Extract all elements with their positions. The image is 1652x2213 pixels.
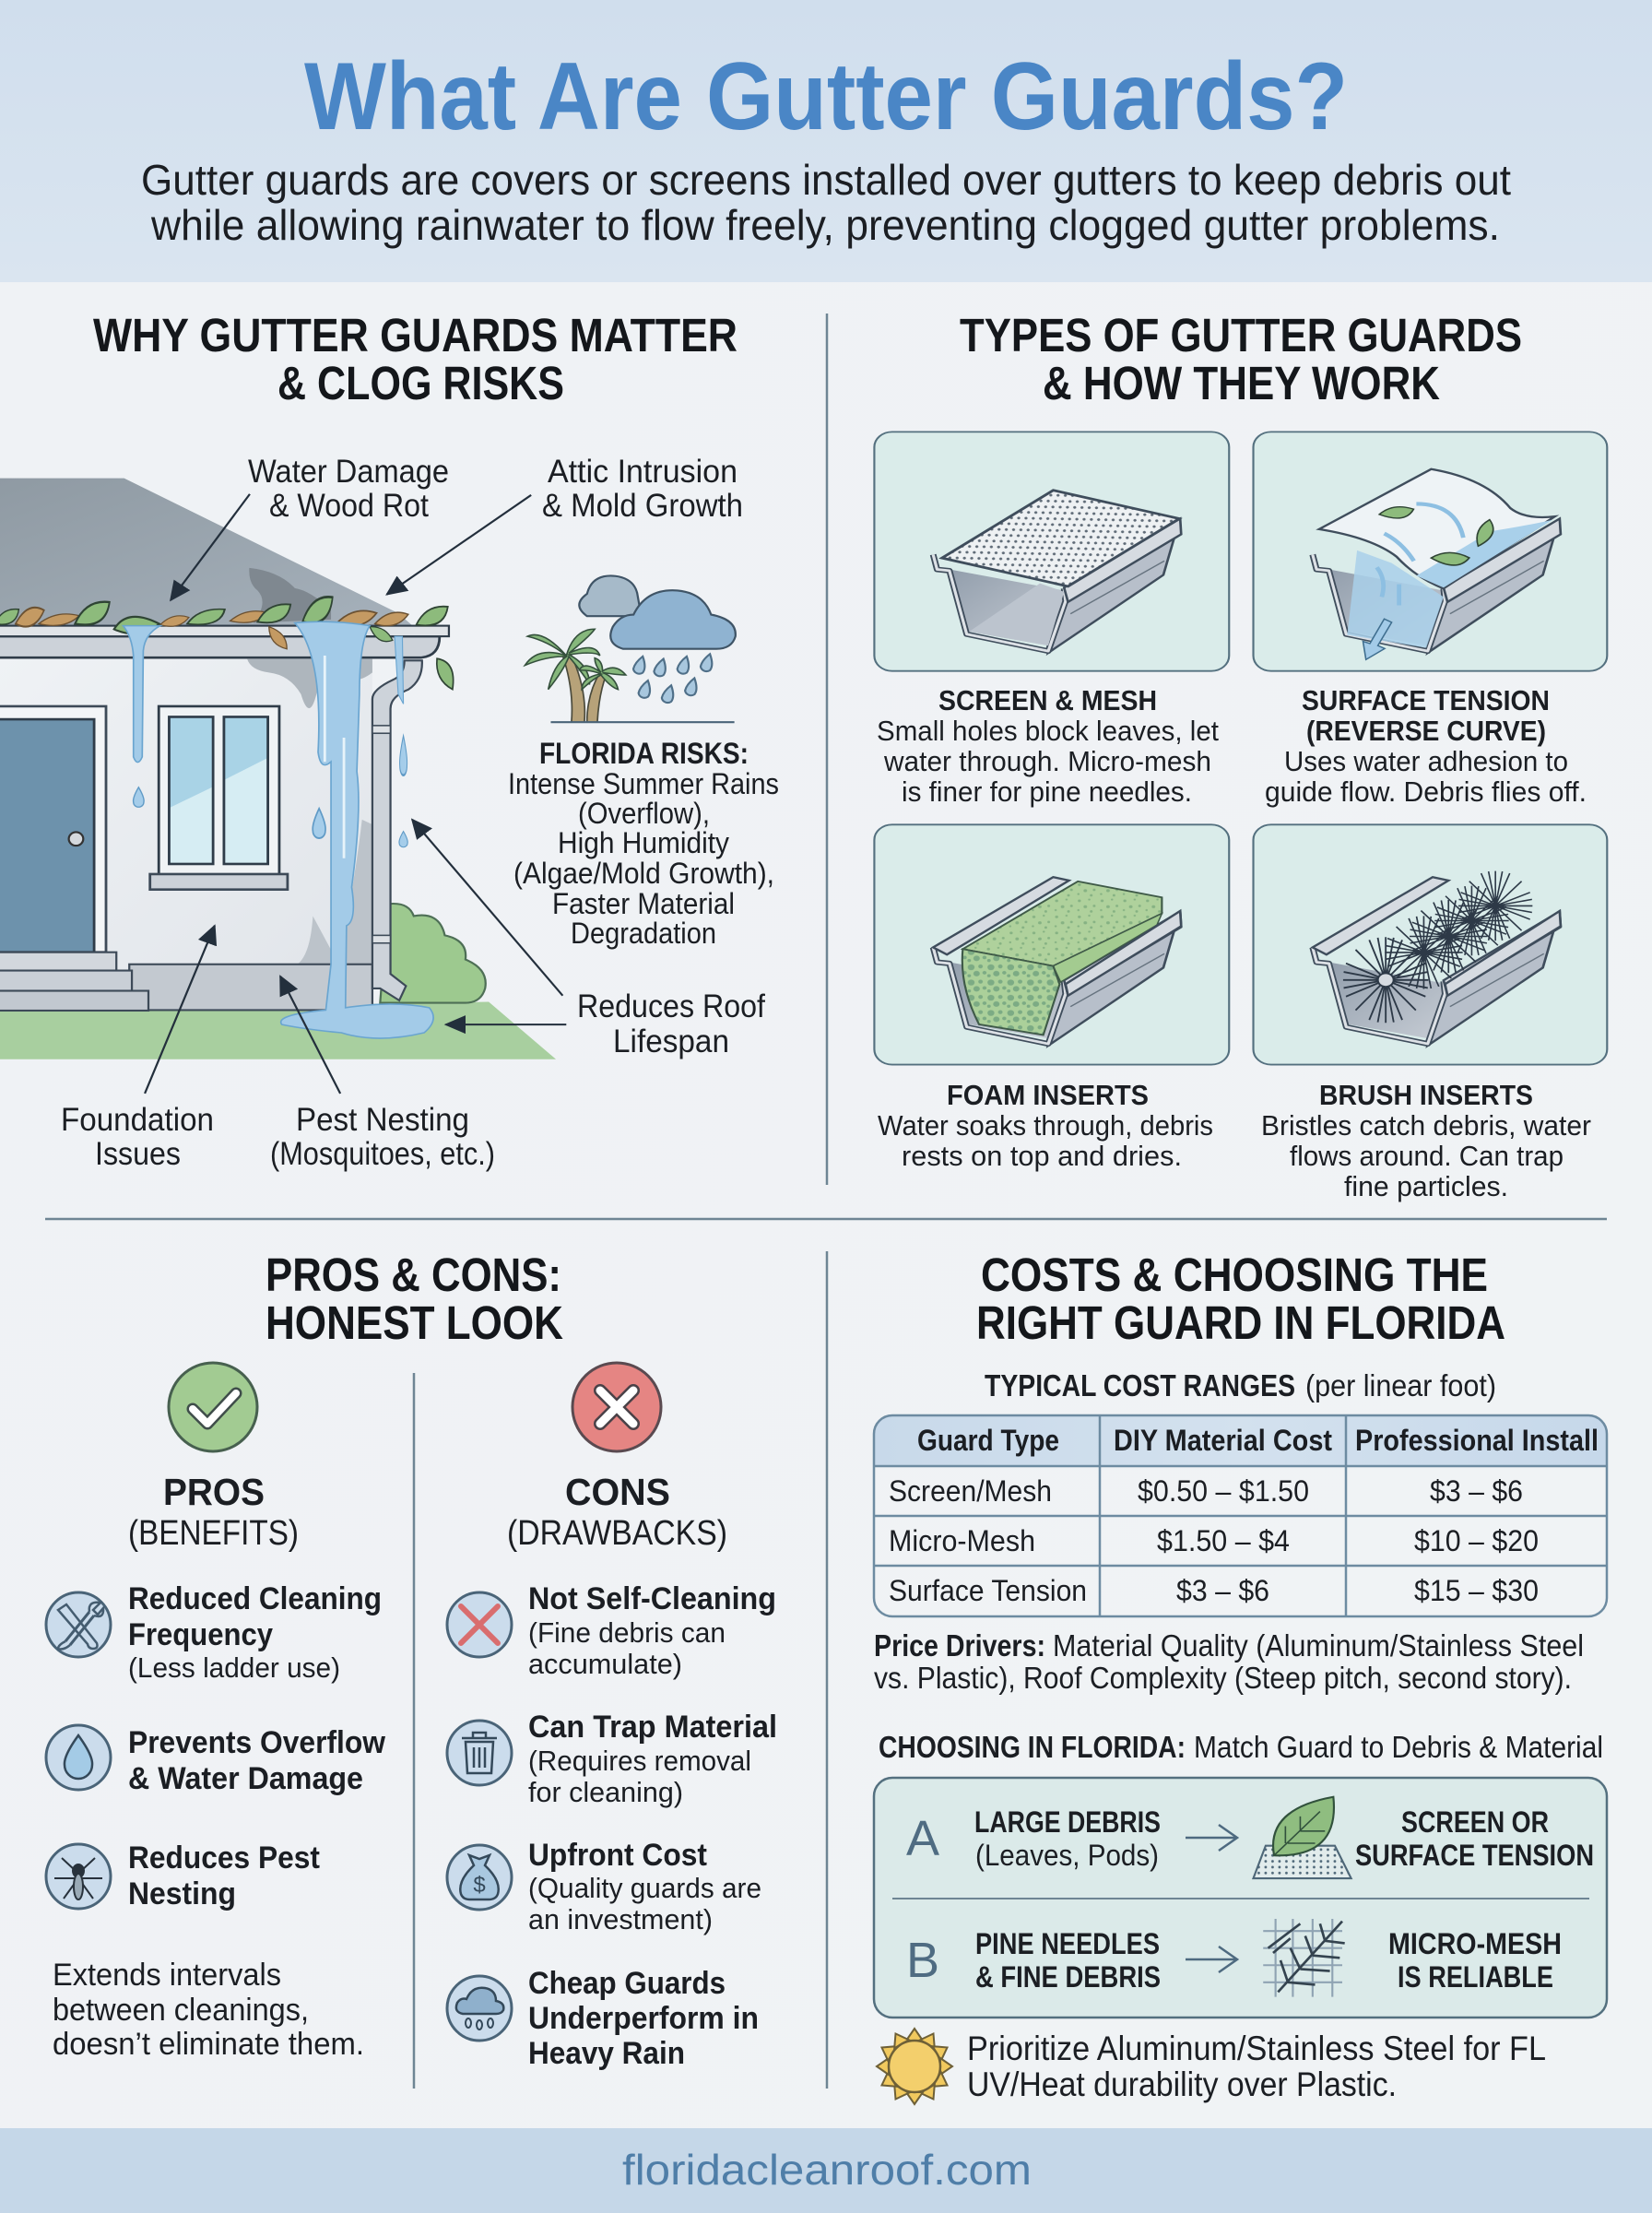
florida risks text: Intense Summer Rains — [508, 767, 779, 800]
row a: SURFACE TENSION — [1355, 1839, 1594, 1872]
caption: screen and mesh: is finer for pine needles. — [902, 775, 1192, 808]
icon: money bag: $ — [473, 1873, 486, 1898]
caption: brush inserts: flows around. Can trap — [1290, 1140, 1564, 1172]
pros heading: (BENEFITS) — [128, 1514, 299, 1553]
row: screen mesh — [889, 1474, 1523, 1508]
caption: screen and mesh: water through. Micro-mesh — [883, 745, 1211, 777]
callout labels: Pest Nesting — [296, 1102, 469, 1138]
overflowing water — [281, 621, 433, 1038]
panel: gutter type cards — [874, 432, 1607, 1065]
callout labels: & Mold Growth — [542, 488, 743, 524]
icon: red x — [447, 1592, 512, 1657]
callout labels: Lifespan — [613, 1024, 729, 1059]
caption: screen and mesh — [877, 684, 1219, 808]
con: not self cleaning: accumulate) — [528, 1648, 682, 1680]
row b: PINE NEEDLES — [975, 1927, 1160, 1960]
material tip: Prioritize Aluminum/Stainless Steel for FL — [967, 2030, 1546, 2067]
header band — [0, 0, 1652, 282]
caption: surface tension — [1265, 684, 1587, 808]
heading: types of gutter guards — [960, 309, 1522, 409]
intro text: while allowing rainwater to flow freely, preventing clogged gutter problems. — [150, 201, 1500, 249]
panel: guard chooser — [874, 1778, 1607, 2018]
florida risks text: (Overflow), — [578, 797, 710, 830]
price drivers: Material Quality (Aluminum/Stainless Steel — [1053, 1628, 1584, 1663]
choosing heading: CHOOSING IN FLORIDA: — [879, 1730, 1186, 1764]
row: micro mesh: $1.50 – $4 — [1157, 1524, 1290, 1557]
cons heading: (DRAWBACKS) — [507, 1514, 727, 1553]
caption: foam inserts: FOAM INSERTS — [947, 1079, 1149, 1111]
caption: surface tension: Uses water adhesion to — [1284, 745, 1568, 777]
pros note: doesn’t eliminate them. — [53, 2027, 364, 2062]
material tip: UV/Heat durability over Plastic. — [967, 2065, 1397, 2103]
row: micro mesh: Micro-Mesh — [889, 1524, 1035, 1557]
icon: pine needle on micro mesh — [1263, 1919, 1345, 1997]
cost table — [874, 1415, 1607, 1616]
row b: MICRO-MESH — [1388, 1927, 1562, 1960]
callout arrows — [145, 494, 566, 1094]
callout labels: & Wood Rot — [269, 488, 429, 524]
icon: cross — [572, 1363, 661, 1451]
downspout — [372, 660, 422, 1000]
door — [0, 706, 106, 953]
heading: pros and cons — [266, 1249, 563, 1349]
row b: IS RELIABLE — [1398, 1960, 1553, 1994]
brush bristles — [1343, 871, 1532, 1023]
debris leaves — [0, 597, 448, 652]
row: screen mesh: Screen/Mesh — [889, 1474, 1052, 1508]
pro: reduced cleaning: (Less ladder use) — [128, 1651, 340, 1684]
row a: LARGE DEBRIS — [974, 1805, 1161, 1839]
callout labels: Reduces Roof — [577, 988, 765, 1024]
shrub — [380, 904, 486, 1003]
row b: B — [906, 1933, 939, 1988]
con: upfront cost: (Quality guards are — [528, 1872, 761, 1904]
row: micro mesh: $10 – $20 — [1414, 1524, 1539, 1557]
pro: reduces pest nesting: Nesting — [128, 1876, 236, 1911]
pro: reduced cleaning: Reduced Cleaning — [128, 1581, 382, 1616]
panel: pros — [46, 1363, 386, 2062]
row: screen mesh: $0.50 – $1.50 — [1138, 1474, 1309, 1508]
con: cheap guards: Cheap Guards — [528, 1966, 726, 2001]
heading: costs and choosing — [976, 1249, 1505, 1349]
row: surface tension: $3 – $6 — [1176, 1574, 1269, 1607]
heading: why gutter guards matter: & CLOG RISKS — [277, 357, 564, 409]
row a: (Leaves, Pods) — [975, 1839, 1159, 1872]
icon: check — [169, 1363, 257, 1451]
callout labels: Issues — [95, 1136, 181, 1172]
cons heading: CONS — [565, 1471, 670, 1513]
material tip — [967, 2030, 1546, 2103]
icon: tools — [46, 1592, 111, 1657]
icon: sun — [877, 2029, 952, 2104]
house illustration — [0, 479, 566, 1094]
table header — [917, 1424, 1599, 1457]
caption: foam inserts — [878, 1079, 1213, 1172]
price drivers — [874, 1628, 1584, 1695]
arrow b — [1186, 1947, 1237, 1972]
callout labels: (Mosquitoes, etc.) — [270, 1136, 495, 1172]
heading: pros and cons: HONEST LOOK — [266, 1296, 563, 1349]
foundation — [129, 964, 372, 1010]
roof — [0, 479, 414, 627]
heading: pros and cons: PROS & CONS: — [266, 1249, 561, 1301]
pros heading: PROS — [163, 1471, 265, 1513]
con: can trap material — [528, 1710, 777, 1808]
row b — [906, 1919, 1562, 1997]
pros note: between cleanings, — [53, 1993, 309, 2028]
con: cheap guards — [528, 1966, 759, 2071]
row: surface tension: $15 – $30 — [1414, 1574, 1539, 1607]
window — [159, 706, 279, 875]
caption: surface tension: (REVERSE CURVE) — [1306, 715, 1546, 747]
con: can trap material: (Requires removal — [528, 1745, 751, 1777]
icon: water drop — [46, 1725, 111, 1790]
con: not self cleaning — [528, 1581, 776, 1680]
con: cheap guards: Heavy Rain — [528, 2036, 685, 2071]
callout labels: Water Damage — [248, 454, 449, 490]
pro: prevents overflow: Prevents Overflow — [128, 1725, 386, 1760]
heading: types of gutter guards: & HOW THEY WORK — [1043, 357, 1440, 409]
callout labels: Foundation — [61, 1102, 214, 1138]
card: screen and mesh — [874, 432, 1229, 671]
card captions — [877, 684, 1591, 1202]
table header: Guard Type — [917, 1424, 1059, 1457]
row: surface tension — [889, 1574, 1539, 1607]
arrow a — [1186, 1825, 1237, 1851]
florida risks text: FLORIDA RISKS: — [539, 737, 749, 770]
con: not self cleaning: (Fine debris can — [528, 1616, 726, 1649]
florida risks text: High Humidity — [558, 826, 729, 859]
caption: screen and mesh: SCREEN & MESH — [938, 684, 1157, 716]
caption: brush inserts: Bristles catch debris, water — [1261, 1109, 1591, 1142]
card: surface tension — [1254, 432, 1607, 671]
pro: reduced cleaning: Frequency — [128, 1617, 273, 1652]
mold stains — [247, 659, 372, 708]
falling leaf — [437, 658, 454, 690]
row: screen mesh: $3 – $6 — [1430, 1474, 1523, 1508]
pro: reduced cleaning — [128, 1581, 382, 1684]
caption: brush inserts: BRUSH INSERTS — [1319, 1079, 1533, 1111]
pro: reduces pest nesting: Reduces Pest — [128, 1840, 320, 1876]
con: upfront cost: an investment) — [528, 1903, 713, 1935]
con: cheap guards: Underperform in — [528, 2001, 759, 2036]
card: foam inserts — [874, 824, 1229, 1065]
choosing heading — [879, 1730, 1603, 1764]
footer band — [0, 2128, 1652, 2213]
row a — [906, 1797, 1594, 1878]
icon: florida weather — [525, 575, 736, 722]
price drivers: Price Drivers: — [874, 1628, 1045, 1663]
icon: rain cloud — [447, 1976, 512, 2041]
table header: DIY Material Cost — [1114, 1424, 1332, 1457]
icon: mosquito — [46, 1844, 111, 1909]
pro: reduces pest nesting — [128, 1840, 320, 1911]
pro: prevents overflow: & Water Damage — [128, 1761, 363, 1796]
florida risks text: Faster Material — [552, 887, 735, 920]
row a: SCREEN OR — [1401, 1805, 1549, 1839]
heading: costs and choosing: COSTS & CHOOSING THE — [981, 1249, 1488, 1301]
row: surface tension: Surface Tension — [889, 1574, 1087, 1607]
row a: A — [906, 1811, 939, 1866]
footer band: floridacleanroof.com — [622, 2146, 1032, 2194]
table header: Professional Install — [1355, 1424, 1599, 1457]
cons heading — [507, 1471, 727, 1553]
caption: foam inserts: Water soaks through, debris — [878, 1109, 1213, 1142]
grass — [0, 1002, 556, 1059]
layout dividers — [45, 314, 1607, 2089]
card: brush inserts — [1254, 824, 1607, 1065]
row: micro mesh — [889, 1524, 1539, 1557]
wall — [0, 658, 372, 1010]
table title: TYPICAL COST RANGES — [985, 1368, 1295, 1402]
price drivers: vs. Plastic), Roof Complexity (Steep pitch, second story). — [874, 1661, 1572, 1695]
caption: surface tension: SURFACE TENSION — [1302, 684, 1550, 716]
heading: costs and choosing: RIGHT GUARD IN FLORIDA — [976, 1296, 1505, 1349]
caption: surface tension: guide flow. Debris flies off. — [1265, 775, 1587, 808]
heading: why gutter guards matter: WHY GUTTER GUARDS MATTER — [93, 309, 738, 361]
pros heading — [128, 1471, 299, 1553]
con: upfront cost: Upfront Cost — [528, 1838, 707, 1873]
caption: screen and mesh: Small holes block leaves, let — [877, 715, 1219, 747]
icon: money bag — [447, 1845, 512, 1910]
gutter — [0, 636, 440, 657]
icon: trash can — [447, 1721, 512, 1785]
table title: (per linear foot) — [1305, 1368, 1496, 1402]
heading: why gutter guards matter — [93, 309, 738, 409]
row b: & FINE DEBRIS — [975, 1960, 1161, 1994]
title: What Are Gutter Guards? — [304, 43, 1348, 150]
heading: types of gutter guards: TYPES OF GUTTER GUARDS — [960, 309, 1522, 361]
florida risks text — [508, 737, 779, 950]
intro text: Gutter guards are covers or screens installed over gutters to keep debris out — [141, 156, 1511, 204]
con: can trap material: Can Trap Material — [528, 1710, 777, 1745]
intro text — [141, 156, 1511, 249]
icon: leaf on mesh — [1254, 1797, 1351, 1878]
con: upfront cost — [528, 1838, 761, 1935]
choosing heading: Match Guard to Debris & Material — [1194, 1730, 1603, 1764]
caption: brush inserts: fine particles. — [1344, 1170, 1508, 1202]
steps — [0, 953, 116, 971]
con: not self cleaning: Not Self-Cleaning — [528, 1581, 776, 1616]
callout labels — [61, 454, 765, 1172]
caption: brush inserts — [1261, 1079, 1591, 1202]
florida risks text: (Algae/Mold Growth), — [513, 857, 774, 890]
con: can trap material: for cleaning) — [528, 1776, 683, 1808]
pro: prevents overflow — [128, 1725, 386, 1796]
pros note — [53, 1958, 364, 2062]
florida risks text: Degradation — [571, 917, 716, 950]
caption: foam inserts: rests on top and dries. — [902, 1140, 1182, 1172]
panel: cons — [447, 1363, 777, 2071]
pros note: Extends intervals — [53, 1958, 281, 1993]
callout labels: Attic Intrusion — [548, 454, 738, 490]
